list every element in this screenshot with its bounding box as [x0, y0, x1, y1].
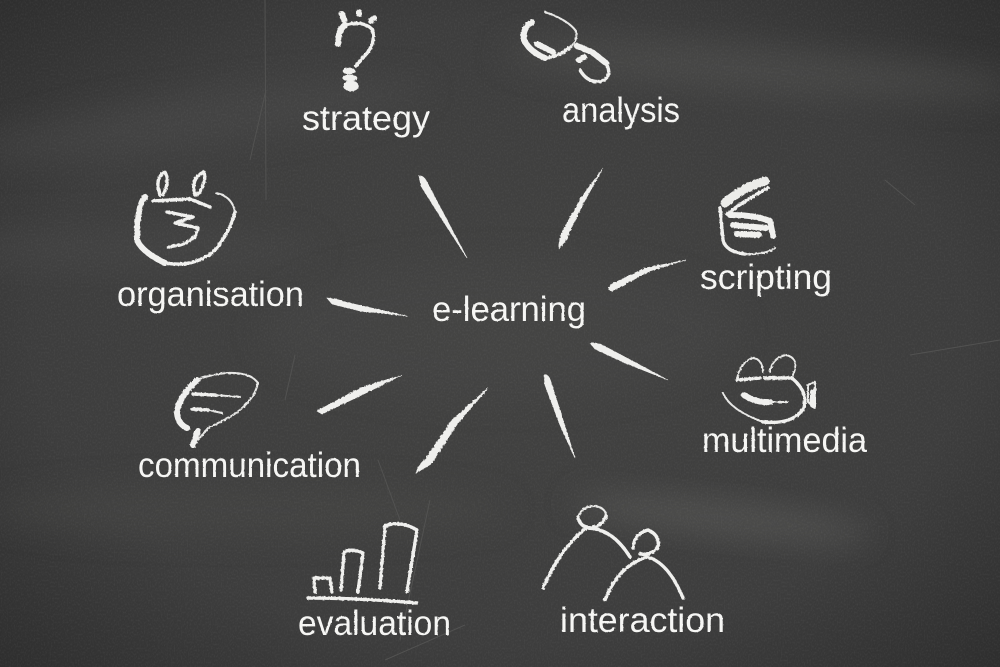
label: scripting: scripting — [700, 258, 832, 297]
spoke to communication — [317, 375, 402, 414]
icon: question mark with sparks — [338, 12, 374, 91]
spoke to analysis — [559, 168, 603, 249]
spoke to evaluation — [416, 388, 488, 473]
centre label: e-learning: e-learning — [432, 290, 586, 329]
spoke to scripting — [608, 260, 686, 291]
spoke to organisation — [327, 298, 407, 316]
icon: bar chart — [308, 524, 417, 603]
spoke to strategy — [419, 176, 467, 258]
label: multimedia: multimedia — [702, 421, 868, 460]
label: communication: communication — [138, 446, 361, 485]
spoke to multimedia — [590, 343, 668, 380]
spoke to interaction — [544, 375, 575, 458]
label: organisation: organisation — [117, 275, 304, 314]
icon: speech bubble — [177, 373, 258, 445]
icon: two people — [543, 506, 683, 600]
label: analysis: analysis — [562, 91, 680, 130]
icon: magnifier glasses — [524, 12, 609, 82]
label: strategy: strategy — [302, 99, 431, 138]
label: evaluation: evaluation — [298, 604, 451, 643]
label: interaction: interaction — [560, 601, 725, 640]
icon: film camera — [723, 355, 815, 422]
icon: clapperboard — [720, 181, 775, 254]
icon: calendar — [137, 172, 235, 264]
